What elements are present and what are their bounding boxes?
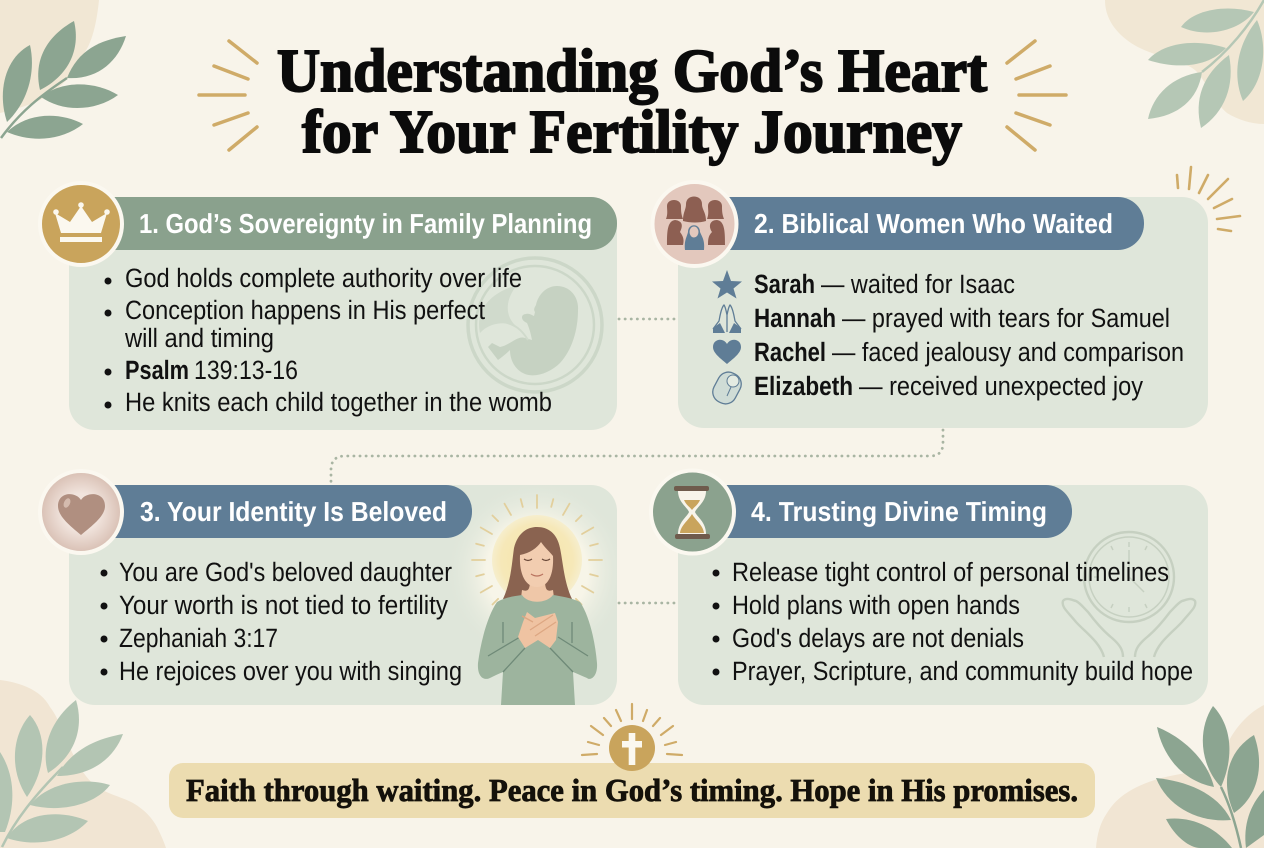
dotted connector: panel 3 to panel 4 xyxy=(619,602,678,604)
sunburst beside panel 2 xyxy=(1177,167,1240,231)
bullet list xyxy=(100,557,462,686)
title sunburst left xyxy=(199,41,257,150)
panel 4: Divine Timing xyxy=(651,470,1208,705)
panel 1: God's Sovereignty xyxy=(40,183,617,430)
list item: Sarah: — waited for Isaac xyxy=(821,269,1015,299)
footer banner xyxy=(169,763,1095,818)
list item: Rachel: — faced jealousy and comparison xyxy=(832,337,1184,367)
dotted connector: panel 1 to panel 2 xyxy=(619,318,678,320)
title: for Your Fertility Journey xyxy=(302,99,962,166)
header bar xyxy=(100,197,617,250)
bullet list: Release tight control of personal timelines xyxy=(732,557,1169,587)
footer banner: Faith through waiting. Peace in God’s timing. Hope in His promises. xyxy=(186,772,1078,809)
icon: heart badge xyxy=(40,471,122,553)
bullet list xyxy=(712,557,1193,686)
bullet list: Psalm xyxy=(125,355,189,385)
bullet list: Zephaniah 3:17 xyxy=(119,623,278,653)
list item: Rachel: Rachel xyxy=(754,337,826,367)
heading: 3. Your Identity Is Beloved xyxy=(140,496,447,527)
bullet list xyxy=(104,263,552,417)
list item: Sarah xyxy=(712,269,1015,299)
header bar xyxy=(710,197,1144,250)
watermark: clock in open hands xyxy=(1063,532,1195,657)
heading: 2. Biblical Women Who Waited xyxy=(754,208,1113,239)
watermark: fetus in womb xyxy=(468,258,602,392)
list item: Hannah: — prayed with tears for Samuel xyxy=(842,303,1170,333)
title xyxy=(277,38,988,166)
bullet list: He knits each child together in the womb xyxy=(125,387,552,417)
header bar xyxy=(100,485,472,538)
list item: Elizabeth xyxy=(709,368,1144,408)
list item: Hannah: Hannah xyxy=(754,303,836,333)
list item: Elizabeth: Elizabeth xyxy=(754,371,853,401)
decorative corner: top left leaves xyxy=(0,0,126,139)
bullet list: God's delays are not denials xyxy=(732,623,1024,653)
heading: 4. Trusting Divine Timing xyxy=(751,496,1047,527)
decorative corner: bottom right leaves xyxy=(1096,705,1264,848)
bullet list: Hold plans with open hands xyxy=(732,590,1020,620)
bullet list: He rejoices over you with singing xyxy=(119,656,462,686)
icon: cross with rays xyxy=(582,704,682,771)
list item: Hannah xyxy=(713,303,1170,333)
decorative corner: bottom left leaves xyxy=(0,680,166,848)
panel 3: Your Identity xyxy=(40,471,629,705)
list item: Elizabeth: — received unexpected joy xyxy=(859,371,1144,401)
bullet list: Prayer, Scripture, and community build hope xyxy=(732,656,1193,686)
panel 2: Biblical Women xyxy=(652,182,1208,428)
icon: hourglass badge xyxy=(651,470,734,554)
title sunburst right xyxy=(1007,41,1066,150)
title: Understanding God’s Heart xyxy=(277,38,988,105)
heading: 1. God’s Sovereignty in Family Planning xyxy=(139,208,592,239)
icon: crown badge xyxy=(40,183,122,265)
bullet list: Conception happens in His perfect xyxy=(125,295,486,325)
icon: group of women xyxy=(652,182,736,266)
bullet list: will and timing xyxy=(124,323,274,353)
list item: Rachel xyxy=(713,337,1184,367)
header bar xyxy=(710,485,1072,538)
bullet list: God holds complete authority over life xyxy=(125,263,522,293)
list item: Sarah: Sarah xyxy=(754,269,815,299)
bullet list: 139:13-16 xyxy=(194,355,298,385)
decorative corner: top right leaves xyxy=(1105,0,1264,128)
dotted connector: panel 2 to panel 3 xyxy=(331,430,943,485)
bullet list: Your worth is not tied to fertility xyxy=(119,590,449,620)
bullet list: You are God's beloved daughter xyxy=(119,557,452,587)
illustration: woman with halo xyxy=(470,494,605,705)
